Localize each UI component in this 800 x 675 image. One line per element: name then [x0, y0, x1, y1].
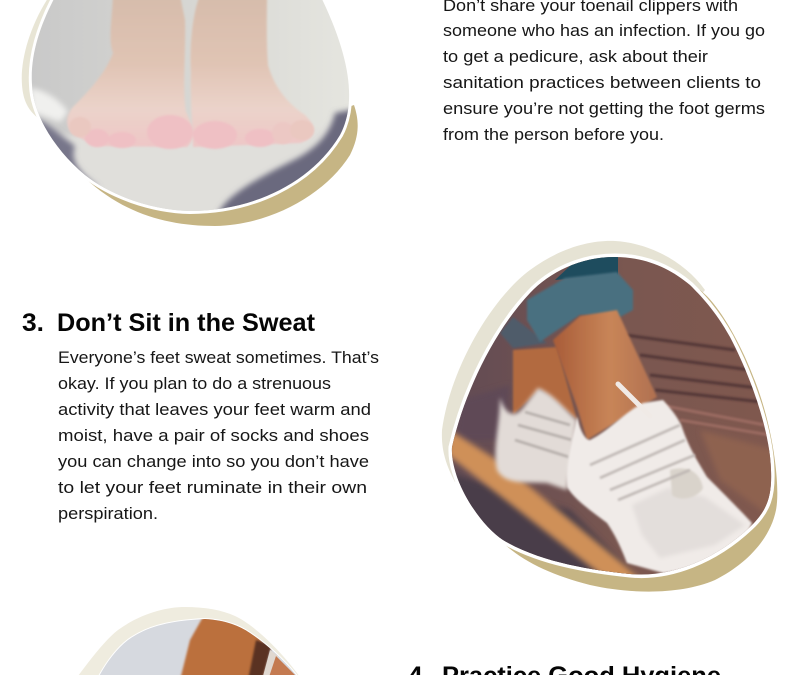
white cloth — [64, 134, 206, 211]
cream backing shape — [75, 607, 302, 675]
left jeans cuff — [500, 317, 547, 348]
image blob: bare feet — [20, 0, 360, 226]
image blob: hygiene photo — [75, 607, 305, 675]
sneaker mesh — [632, 488, 745, 558]
sneaker tongue — [670, 468, 703, 499]
body text: tip 3: perspiration. — [58, 504, 158, 523]
toes — [69, 115, 314, 149]
body text: tip 2: ensure you’re not getting the foot germs — [443, 99, 765, 118]
right foot — [191, 0, 314, 147]
dark strip — [248, 640, 272, 675]
pavement — [456, 472, 638, 574]
skin — [180, 615, 268, 675]
left foot — [67, 0, 193, 147]
body text: tip 3: moist, have a pair of socks and shoes — [58, 426, 369, 445]
body text: tip 2: from the person before you. — [443, 125, 664, 144]
dark jeans — [555, 257, 618, 280]
heading: tip 3: 3. — [22, 309, 44, 337]
heading: tip 3: Don’t Sit in the Sweat — [57, 309, 316, 337]
body text: tip 2: sanitation practices between clients to — [443, 73, 761, 92]
body text: tip 2 — [443, 0, 765, 144]
photo of sneakers — [440, 250, 780, 582]
gold backing shape — [500, 290, 777, 592]
photo — [100, 619, 296, 675]
jeans cuff — [527, 272, 633, 342]
cream backing shape — [442, 241, 705, 482]
skin right — [270, 656, 295, 675]
pale strip — [262, 650, 278, 675]
body text: tip 3 — [58, 348, 379, 523]
body text: tip 3: Everyone’s feet sweat sometimes. That’s — [58, 348, 379, 367]
back sneaker laces — [515, 412, 572, 458]
photo of feet — [32, 0, 350, 211]
sunlit strip — [448, 430, 640, 582]
cream backing shape — [22, 0, 100, 118]
body text: tip 3: to let your feet ruminate in their own — [58, 478, 367, 497]
body text: tip 2: someone who has an infection. If you go — [443, 21, 765, 40]
white ring — [452, 257, 771, 575]
image blob: sneakers — [440, 241, 780, 592]
brick stripes — [625, 335, 762, 402]
back sneaker — [495, 388, 577, 490]
dark shadow right — [216, 106, 348, 209]
body text: tip 3: you can change into so you don’t have — [58, 452, 369, 471]
gold backing shape — [85, 105, 358, 226]
body text: tip 2: to get a pedicure, ask about their — [443, 47, 708, 66]
body text: tip 3: activity that leaves your feet warm and — [58, 400, 371, 419]
front sneaker — [566, 400, 752, 573]
laces — [590, 425, 695, 500]
white ring — [97, 619, 300, 675]
dark shadow left — [40, 117, 99, 184]
white ring — [32, 0, 349, 211]
front leg — [553, 310, 657, 440]
pale cloth fold — [30, 88, 68, 122]
lace loop — [616, 382, 642, 408]
back leg — [513, 347, 577, 420]
body text: tip 3: okay. If you plan to do a strenuous — [58, 374, 331, 393]
